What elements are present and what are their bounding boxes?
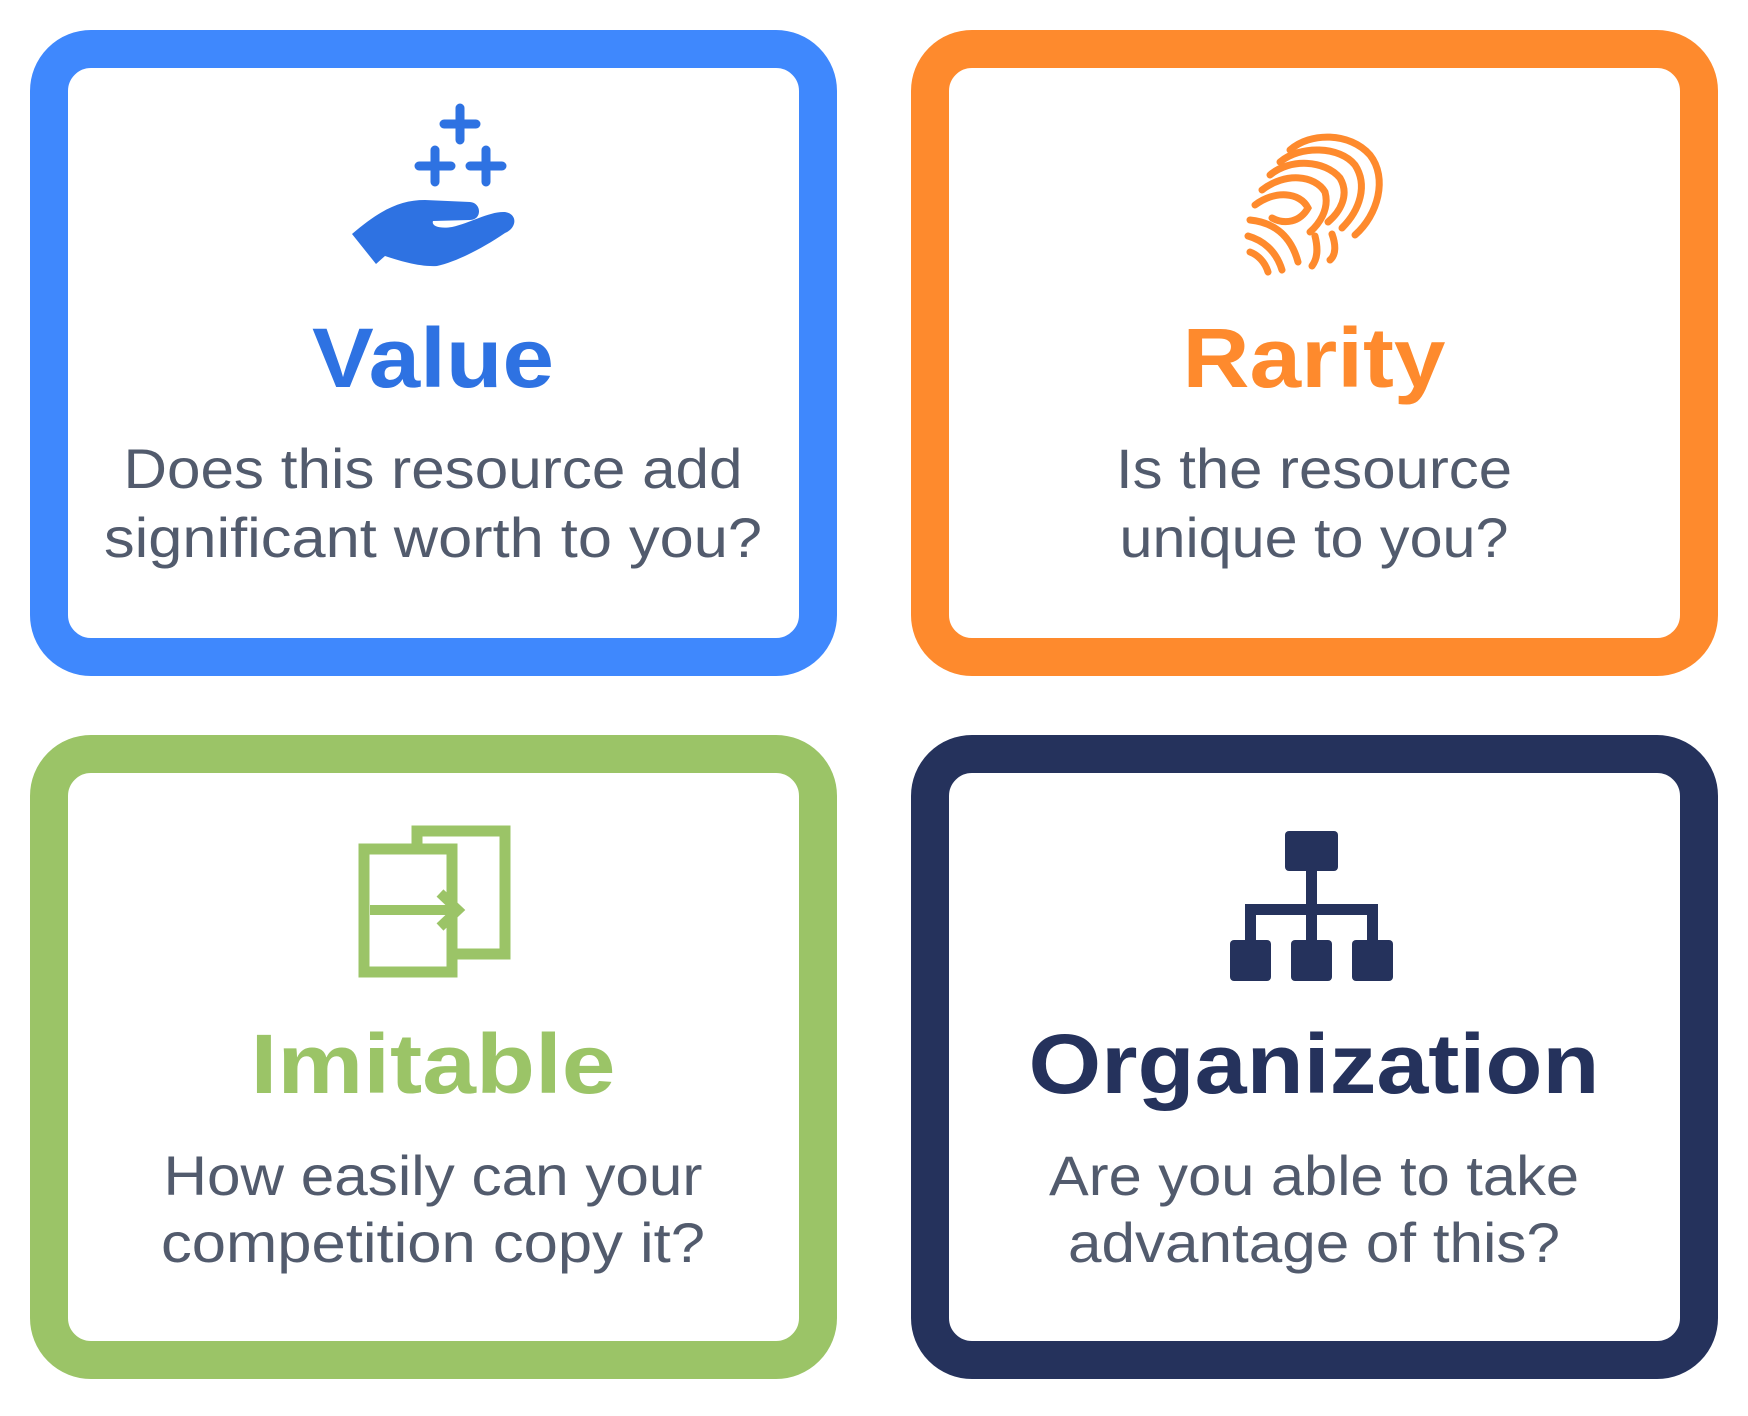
heading: Rarity: Rarity (1182, 311, 1446, 405)
panel: rarity (930, 49, 1699, 657)
text: value question: significant worth to you? (104, 506, 762, 569)
icon: hand with plus signs (352, 108, 514, 266)
heading: Imitable: Imitable (250, 1017, 616, 1111)
panel: imitable (49, 754, 818, 1360)
panel: organization (930, 754, 1699, 1360)
icon: copy squares with arrow (364, 831, 505, 972)
heading: Organization: Organization (1028, 1017, 1600, 1111)
text: imitable question: competition copy it? (161, 1211, 705, 1274)
text: organization question (1049, 1144, 1579, 1274)
heading: Value: Value (312, 311, 554, 405)
text: imitable question (161, 1144, 705, 1274)
icon: fingerprint (1248, 137, 1379, 272)
text: rarity question: unique to you? (1120, 506, 1508, 569)
text: organization question: Are you able to take (1049, 1144, 1579, 1207)
text: value question: Does this resource add (124, 437, 742, 500)
text: rarity question (1116, 437, 1512, 569)
text: imitable question: How easily can your (164, 1144, 702, 1207)
icon: org chart (1230, 831, 1393, 981)
text: organization question: advantage of this? (1068, 1211, 1560, 1274)
panel: value (49, 49, 818, 657)
text: value question (104, 437, 762, 569)
text: rarity question: Is the resource (1116, 437, 1512, 500)
